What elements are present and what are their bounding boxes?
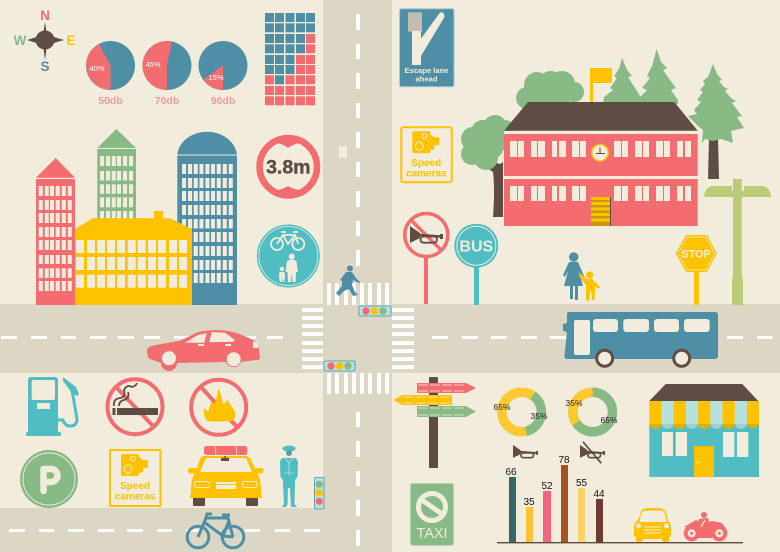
school building bbox=[504, 102, 698, 226]
pie chart: 50db bbox=[86, 41, 135, 107]
bar chart: 44 bbox=[593, 489, 605, 500]
speed cameras sign lower: cameras bbox=[115, 492, 156, 502]
bar chart: 55 bbox=[576, 478, 587, 489]
shop awning bbox=[649, 401, 759, 429]
signpost bbox=[393, 377, 476, 468]
bicycle and pedestrian sign bbox=[257, 224, 320, 288]
bar chart bbox=[497, 455, 743, 543]
donut chart 1 bbox=[493, 392, 548, 432]
no horn sign bbox=[405, 214, 448, 304]
blue domed tower bbox=[177, 132, 237, 305]
bar chart: 35 bbox=[523, 497, 535, 508]
speed cameras sign: Speed bbox=[411, 158, 441, 169]
traffic light vertical bbox=[314, 478, 324, 509]
parking sign bbox=[20, 450, 78, 508]
yellow taxi icon bbox=[634, 508, 671, 542]
walking pedestrian bbox=[336, 266, 360, 296]
bicycle bbox=[187, 514, 244, 548]
no fire sign bbox=[191, 380, 246, 435]
crossed horn icon bbox=[580, 442, 605, 463]
blue bus bbox=[563, 312, 718, 366]
compass: E bbox=[66, 33, 76, 48]
red arrow sign bbox=[417, 383, 476, 393]
waffle chart bbox=[265, 13, 315, 105]
trees behind school bbox=[461, 49, 678, 217]
donut chart 1: 65% bbox=[493, 402, 511, 412]
horn icon bbox=[513, 445, 538, 458]
no smoking sign bbox=[108, 379, 162, 434]
compass: S bbox=[40, 59, 50, 74]
bus stop sign bbox=[454, 224, 498, 305]
green arrow sign bbox=[417, 406, 476, 417]
bar chart: 78 bbox=[558, 455, 570, 466]
mother and child bbox=[563, 252, 600, 301]
speed cameras sign lower bbox=[110, 450, 160, 506]
compass: N bbox=[40, 8, 50, 23]
policeman bbox=[280, 446, 298, 507]
stop sign: STOP bbox=[681, 248, 711, 260]
taxi sign: TAXI bbox=[416, 526, 448, 542]
pie chart: 50db: 50db bbox=[98, 95, 123, 107]
donut chart 2: 65% bbox=[600, 415, 618, 425]
donut chart 2: 35% bbox=[565, 398, 583, 408]
pie chart: 70db bbox=[142, 41, 192, 107]
pie chart: 70db: 45% bbox=[145, 60, 161, 69]
speed cameras sign lower: Speed bbox=[120, 481, 150, 492]
donut chart 1: 35% bbox=[530, 411, 548, 421]
red motorcycle icon bbox=[684, 512, 727, 539]
shop bbox=[649, 384, 759, 477]
taxi sign bbox=[410, 484, 454, 546]
bar chart: 66 bbox=[505, 467, 517, 478]
compass: W bbox=[14, 33, 27, 48]
bar chart: 52 bbox=[541, 481, 553, 492]
speed cameras sign: cameras bbox=[406, 168, 447, 179]
fuel pump bbox=[26, 377, 79, 436]
bus stop sign: BUS bbox=[459, 238, 494, 256]
height limit sign 3.8m: 3.8m bbox=[266, 156, 311, 178]
yellow building bbox=[75, 211, 192, 305]
green tower bbox=[97, 129, 136, 224]
pie chart: 90db bbox=[198, 41, 248, 107]
school door bbox=[591, 197, 611, 226]
height limit sign 3.8m bbox=[260, 138, 317, 195]
traffic light horizontal bottom bbox=[324, 361, 355, 371]
traffic light horizontal top bbox=[359, 306, 391, 316]
escape lane sign: ahead bbox=[416, 74, 438, 84]
stop sign bbox=[676, 235, 717, 305]
yellow arrow sign bbox=[393, 395, 452, 405]
escape lane sign bbox=[400, 9, 454, 87]
red car bbox=[147, 330, 260, 371]
police car bbox=[188, 446, 264, 506]
donut chart 2 bbox=[565, 392, 618, 432]
escape lane sign: Escape lane bbox=[405, 66, 448, 75]
street lamp bbox=[704, 179, 771, 305]
pie chart: 70db: 70db bbox=[155, 95, 179, 107]
pie chart: 50db: 40% bbox=[89, 64, 105, 73]
clock bbox=[592, 144, 608, 161]
compass bbox=[14, 8, 76, 74]
flag bbox=[590, 68, 612, 104]
pine tree bbox=[688, 64, 744, 179]
speed cameras sign bbox=[401, 127, 452, 182]
pie chart: 90db: 15% bbox=[208, 73, 224, 82]
pie chart: 90db: 90db bbox=[211, 95, 235, 107]
red tower bbox=[36, 158, 75, 305]
